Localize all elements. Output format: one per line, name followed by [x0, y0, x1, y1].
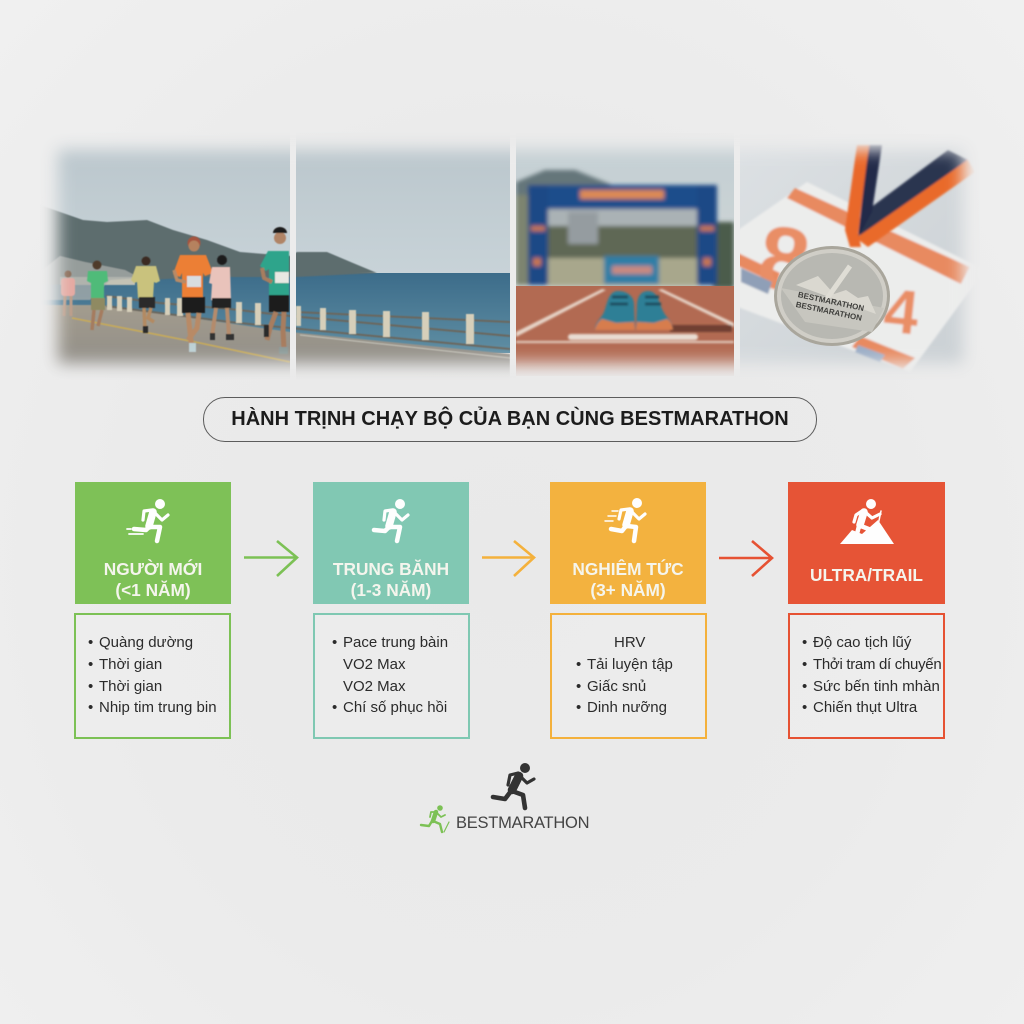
- panel: beginner header: [75, 482, 231, 604]
- runner: teal shirt: [260, 227, 289, 354]
- panel: serious header: NGHIÊM TỨC: [572, 559, 684, 579]
- runner: orange shirt: [173, 236, 213, 352]
- panel: beginner metrics: •: [88, 634, 93, 651]
- photo strip: [45, 142, 974, 375]
- icon: finisher medal: BESTMARATHON: [795, 300, 863, 323]
- panel: beginner header: (<1 NĂM): [115, 580, 191, 600]
- panel: serious metrics: Giấc snủ: [587, 678, 646, 695]
- metric list: Quàng dường: [99, 634, 193, 651]
- white gaps between photos: [290, 142, 296, 374]
- icon: runner with speed dashes: [126, 499, 170, 544]
- panel: intermediate header: (1-3 NĂM): [351, 580, 431, 600]
- photo: runners on the seaside road: [40, 130, 510, 380]
- icon: green runner: [420, 805, 450, 834]
- panel: serious metrics: Tải luyện tập: [587, 656, 673, 673]
- ribbon: [845, 145, 975, 247]
- arrow: green: [244, 540, 299, 577]
- panel: beginner metrics: [74, 613, 231, 739]
- panel: serious metrics: •: [576, 678, 581, 695]
- photo: medal on race bib: 8: [752, 207, 816, 313]
- panel: ultra header: ULTRA/TRAIL: [810, 565, 923, 585]
- arrow: red: [719, 540, 774, 577]
- panel: ultra metrics: •: [802, 699, 807, 716]
- arrow: orange: [482, 540, 536, 577]
- title pill: [203, 397, 817, 442]
- panel: beginner metrics: •: [88, 656, 93, 673]
- panel: intermediate metrics: [313, 613, 470, 739]
- photo: medal on race bib: 4: [881, 276, 923, 349]
- panel: serious metrics: •: [576, 699, 581, 716]
- panel: intermediate header: TRUNG BĂNH: [333, 559, 449, 579]
- icon: runner: [372, 499, 410, 544]
- panel: intermediate metrics: •: [332, 634, 337, 651]
- icon: dark runner: [490, 763, 536, 810]
- panel: ultra metrics: •: [802, 678, 807, 695]
- title pill: HÀNH TRỊNH CHẠY BỘ CỦA BẠN CÙNG BESTMARATHON: [231, 408, 789, 430]
- panel: ultra metrics: Độ cao tịch lũý: [813, 634, 911, 651]
- panel: ultra metrics: [788, 613, 945, 739]
- panel: intermediate metrics: VO2 Max: [343, 656, 406, 673]
- panel: beginner header: NGƯỜI MỚI: [104, 559, 202, 579]
- brand name: BESTMARATHON: [456, 814, 589, 832]
- panel: serious header: [550, 482, 706, 604]
- panel: beginner metrics: •: [88, 678, 93, 695]
- panel: serious metrics: •: [576, 656, 581, 673]
- photo: finish arch and shoes: [516, 130, 734, 376]
- icon: hiker on a mountain: [840, 499, 894, 544]
- icon: finisher medal: BESTMARATHON: [797, 290, 865, 313]
- panel: serious header: (3+ NĂM): [590, 580, 666, 600]
- runner: green shirt: [87, 260, 108, 330]
- icon: finisher medal: [774, 246, 890, 346]
- panel: beginner metrics: Thời gian: [99, 656, 162, 673]
- logo: BestMarathon: [420, 763, 589, 834]
- runner: yellow shirt: [131, 256, 160, 333]
- icon: fast runner: [604, 498, 647, 544]
- panel: intermediate metrics: •: [332, 699, 337, 716]
- panel: ultra metrics: Thởi tram dí chuyến: [813, 656, 941, 673]
- panel: beginner metrics: Thời gian: [99, 678, 162, 695]
- panel: serious metrics: HRV: [614, 634, 645, 651]
- runner: white and pink shirt: [209, 255, 234, 340]
- panel: beginner metrics: Nhip tim trung bin: [99, 699, 217, 716]
- panel: intermediate metrics: VO2 Max: [343, 678, 406, 695]
- panel: ultra metrics: •: [802, 656, 807, 673]
- panel: intermediate header: [313, 482, 469, 604]
- panel: ultra header: [788, 482, 945, 604]
- panel: serious metrics: [550, 613, 707, 739]
- panel: intermediate metrics: Chí số phục hồi: [343, 699, 447, 716]
- panel: beginner metrics: •: [88, 699, 93, 716]
- photo: medal on race bib: [740, 144, 974, 370]
- runner: pink shirt far back: [61, 270, 75, 316]
- icon: running shoes: [595, 291, 673, 330]
- panel: serious metrics: Dinh nưỡng: [587, 699, 667, 716]
- panel: intermediate metrics: Pace trung bàin: [343, 634, 448, 651]
- panel: ultra metrics: Sức bến tinh mhàn: [813, 678, 940, 695]
- panel: ultra metrics: Chiến thụt Ultra: [813, 699, 917, 716]
- panel: ultra metrics: •: [802, 634, 807, 651]
